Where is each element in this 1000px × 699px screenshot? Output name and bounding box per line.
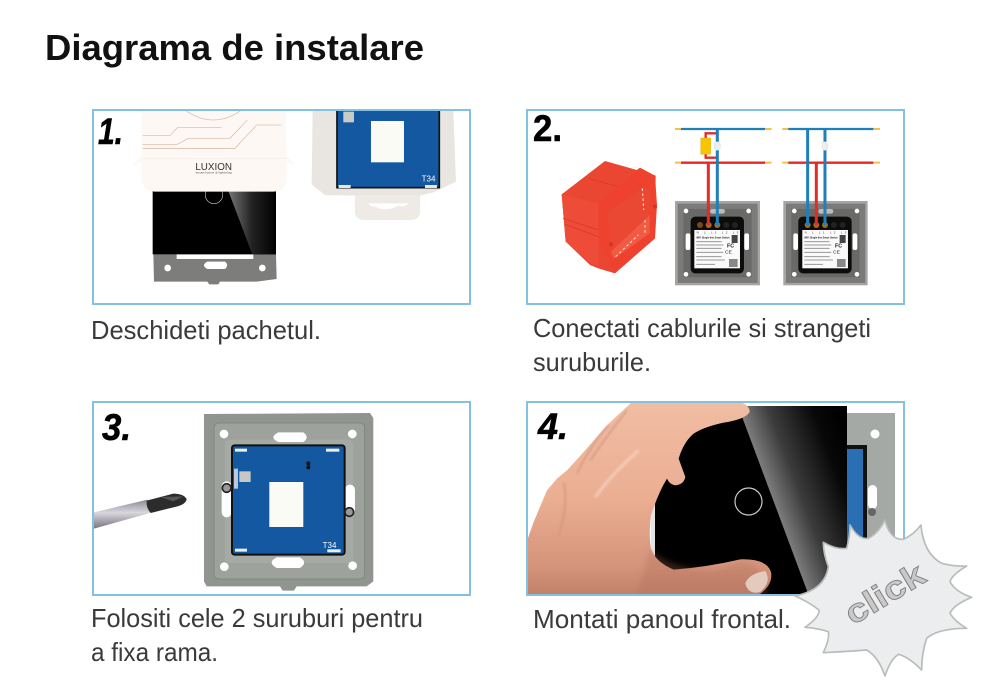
callout: click starburst [795,520,972,676]
step number 3: 3. [102,407,131,448]
switch back left: CE [725,250,733,256]
frame plate with module: T34 [323,541,337,550]
Luxion package [132,110,296,192]
switch back left: FC [727,244,734,250]
switch back left [675,201,760,285]
switch back left: N L L1 L2 L3 [697,230,739,234]
title: Diagrama de instalare [45,27,424,68]
step number 2: 2. [533,108,562,149]
black glass panel [651,406,847,596]
module in tray [312,110,456,220]
switch back right [783,201,868,285]
callout: click starburst: click [838,554,932,632]
frame plate with module [204,413,373,591]
switch back right: N L L1 L2 L3 [805,230,847,234]
wiring diagram right [782,129,880,225]
hand [526,402,771,596]
caption 2 second line: suruburile. [533,347,651,377]
screwdriver [94,494,187,529]
grey base plate [153,254,277,284]
step number 4: 4. [537,406,568,447]
caption 4: Montati panoul frontal. [533,604,791,634]
caption 3: Folositi cele 2 suruburi pentru [91,603,423,633]
red mounting box [562,161,657,273]
switch back left: WiFi Single-line Smart Switch [696,235,730,239]
panel: step 3 [93,402,470,595]
Luxion package: smart home & lightning [196,171,232,175]
caption 1: Deschideti pachetul. [91,315,321,345]
panel: step 1 [93,110,470,304]
frame behind the glass [847,413,895,544]
module in tray: T34 [422,175,436,184]
panel: step 2 [527,108,904,304]
caption 2: Conectati cablurile si strangeti [533,313,871,343]
black glass panel [153,186,276,254]
switch back right: WiFi Single-line Smart Switch [804,235,838,239]
panel: step 4 [526,402,904,596]
wiring diagram left [675,129,772,225]
step number 1: 1. [98,111,123,152]
caption 3 second line: a fixa rama. [91,637,218,667]
Luxion package: LUXION [195,162,232,173]
switch back right: FC [835,244,842,250]
switch back right: CE [833,250,841,256]
